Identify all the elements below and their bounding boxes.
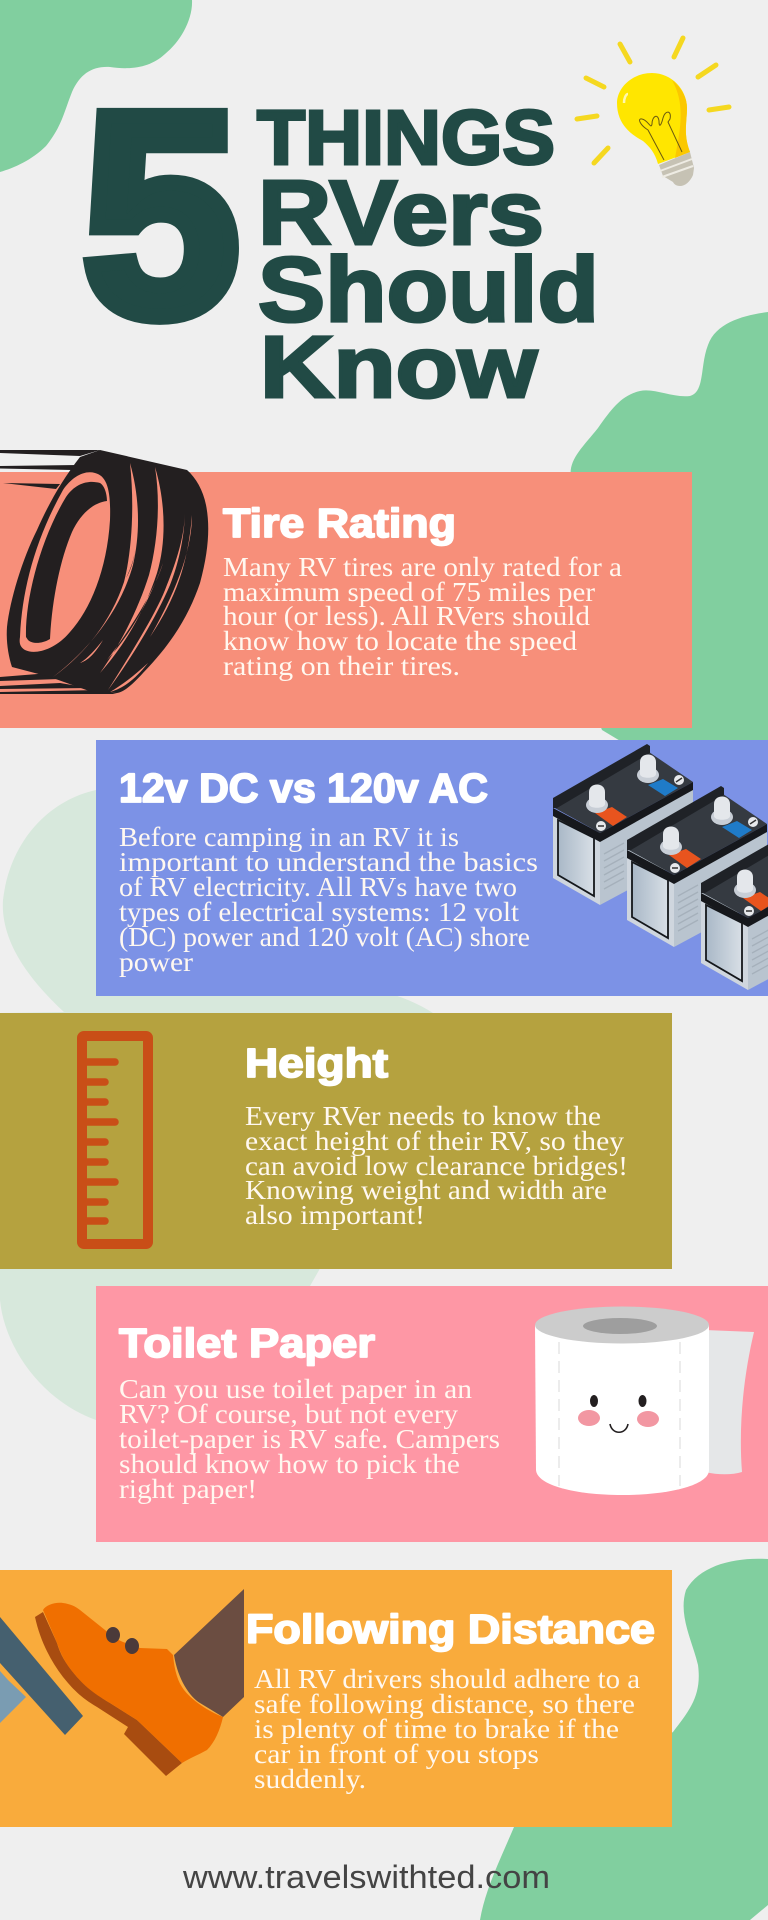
body text: of RV electricity. All RVs have two bbox=[119, 872, 517, 902]
panel: height bbox=[0, 1013, 672, 1269]
title line: Should: Should bbox=[258, 239, 599, 341]
heading: Tire Rating bbox=[223, 500, 456, 546]
heading: Toilet Paper bbox=[119, 1320, 375, 1366]
body text: Knowing weight and width are bbox=[245, 1175, 607, 1205]
heading: Height bbox=[245, 1040, 388, 1086]
blob: left pale green bbox=[0, 790, 433, 1420]
body text: RV? Of course, but not every bbox=[119, 1399, 459, 1429]
body text: Every RVer needs to know the bbox=[245, 1101, 601, 1131]
body text: suddenly. bbox=[254, 1764, 366, 1794]
body text: know how to locate the speed bbox=[223, 626, 578, 656]
title line: Know: Know bbox=[260, 319, 537, 416]
body text bbox=[223, 552, 622, 681]
icon: toilet paper roll bbox=[535, 1306, 754, 1495]
body text: right paper! bbox=[119, 1474, 257, 1504]
body text bbox=[119, 822, 538, 977]
body text bbox=[119, 1374, 500, 1504]
body text: rating on their tires. bbox=[223, 651, 460, 681]
panel: 12v DC vs 120v AC bbox=[96, 740, 768, 996]
body text: hour (or less). All RVers should bbox=[223, 601, 591, 631]
body text: car in front of you stops bbox=[254, 1739, 539, 1769]
body text bbox=[254, 1664, 640, 1794]
title line: RVers: RVers bbox=[258, 163, 544, 264]
body text: safe following distance, so there bbox=[254, 1689, 635, 1719]
body text: Many RV tires are only rated for a bbox=[223, 552, 622, 582]
body text: power bbox=[119, 947, 193, 977]
icon: light bulb bbox=[577, 38, 729, 186]
panel background bbox=[96, 1286, 768, 1542]
body text: should know how to pick the bbox=[119, 1449, 460, 1479]
tire speed lines bbox=[0, 450, 117, 694]
body text: types of electrical systems: 12 volt bbox=[119, 897, 520, 927]
tire body bbox=[7, 450, 208, 693]
body text: maximum speed of 75 miles per bbox=[223, 577, 595, 607]
body text: toilet-paper is RV safe. Campers bbox=[119, 1424, 500, 1454]
heading: Following Distance bbox=[246, 1606, 655, 1652]
footer url: www.travelswithted.com bbox=[182, 1859, 550, 1895]
body text: can avoid low clearance bridges! bbox=[245, 1151, 628, 1181]
blob: upper right green bbox=[571, 312, 768, 760]
body text: also important! bbox=[245, 1200, 425, 1230]
icon: ruler bbox=[82, 1036, 148, 1244]
body text: exact height of their RV, so they bbox=[245, 1126, 625, 1156]
icon: boot on pedal bbox=[0, 1589, 244, 1776]
body text: All RV drivers should adhere to a bbox=[254, 1664, 640, 1694]
panel: following distance bbox=[0, 1570, 672, 1827]
panel background bbox=[96, 740, 768, 996]
icon: tire bbox=[0, 450, 208, 694]
body text: important to understand the basics bbox=[119, 847, 538, 877]
panel: tire rating bbox=[0, 450, 692, 728]
body text: Can you use toilet paper in an bbox=[119, 1374, 473, 1404]
panel background bbox=[0, 1013, 672, 1269]
tire tread slivers bbox=[53, 463, 192, 692]
body text bbox=[245, 1101, 628, 1230]
panel background bbox=[0, 1570, 672, 1827]
body text: is plenty of time to brake if the bbox=[254, 1714, 619, 1744]
blob: top left green bbox=[0, 0, 192, 172]
title line: THINGS: THINGS bbox=[257, 95, 555, 181]
blob: lower right green bbox=[480, 1559, 768, 1920]
body text: (DC) power and 120 volt (AC) shore bbox=[119, 922, 530, 952]
heading: 12v DC vs 120v AC bbox=[119, 765, 488, 811]
title: big numeral 5: 5 bbox=[83, 54, 239, 376]
panel background bbox=[0, 472, 692, 728]
icon: batteries bbox=[553, 744, 768, 990]
body text: Before camping in an RV it is bbox=[119, 822, 459, 852]
panel: toilet paper bbox=[96, 1286, 768, 1542]
title bbox=[83, 54, 599, 416]
tire rim and hole bbox=[20, 472, 110, 652]
